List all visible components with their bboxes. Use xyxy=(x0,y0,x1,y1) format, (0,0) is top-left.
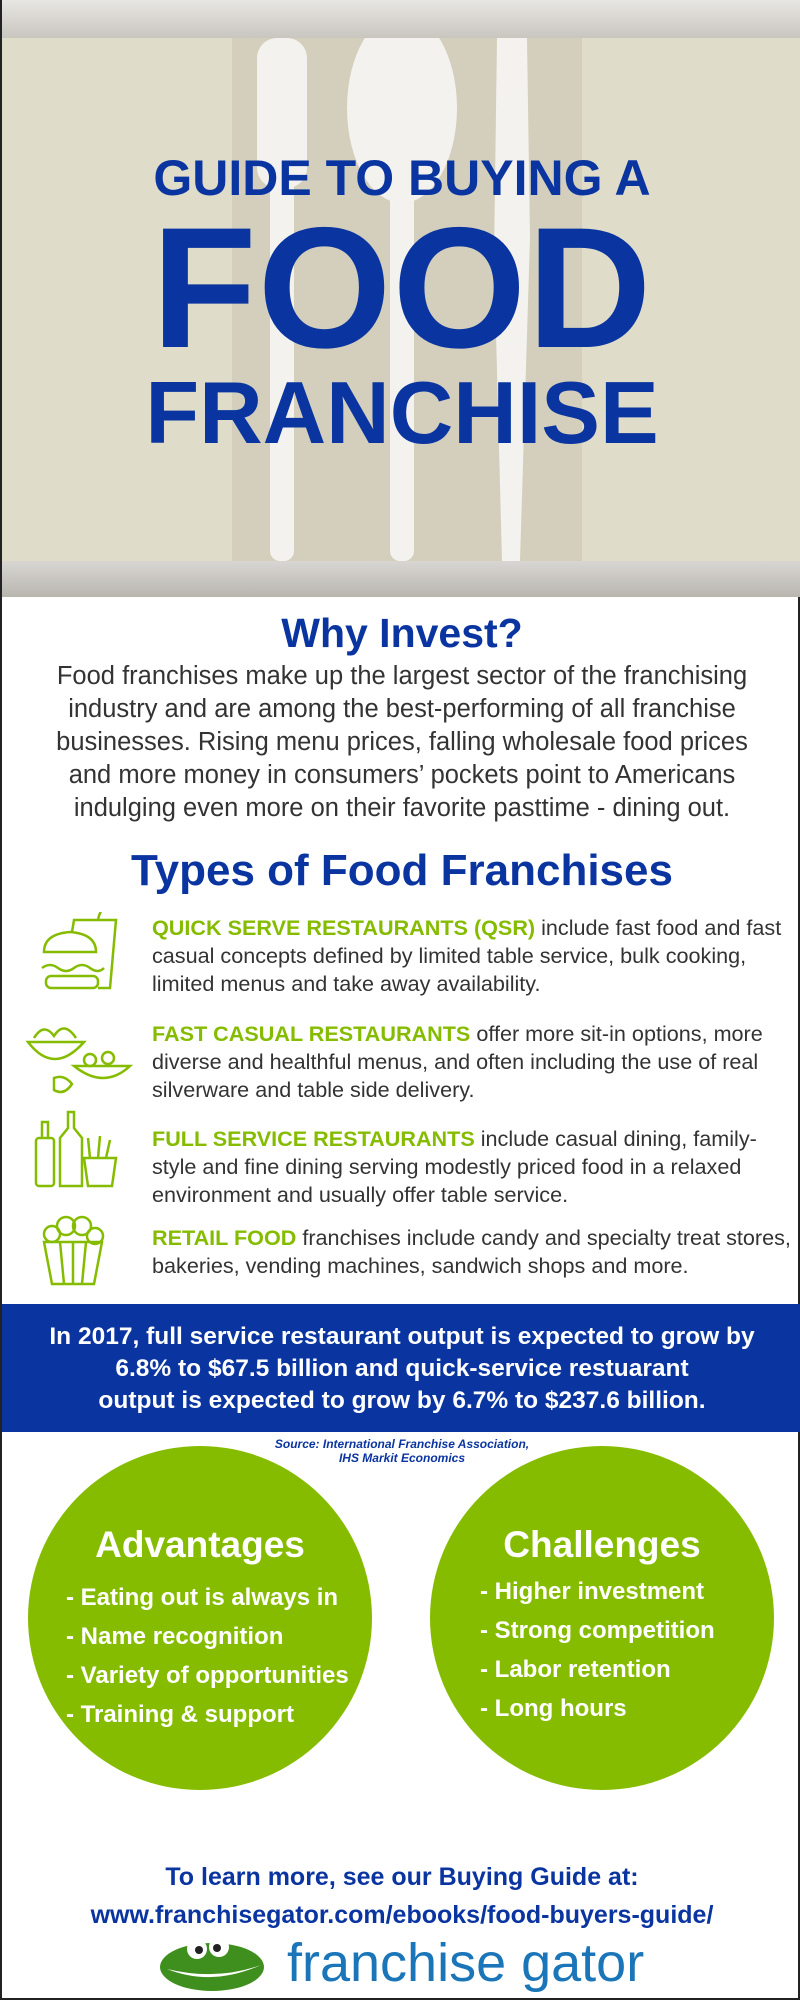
blue band: stats xyxy=(2,1304,800,1432)
item: retail: RETAIL FOOD franchises include candy and specialty treat stores, bakeries, vending machines, sandwich shops and more. xyxy=(152,1225,791,1278)
circle: advantages xyxy=(28,1446,372,1790)
call to action xyxy=(90,1863,714,1929)
circle: advantages: - Training & support xyxy=(66,1701,294,1728)
icon: bottles xyxy=(34,1110,118,1188)
source xyxy=(275,1437,529,1465)
logo: franchise gator xyxy=(287,1933,644,1993)
blue band: stats: In 2017, full service restaurant output is expected to grow by xyxy=(49,1323,755,1350)
blue band: stats: 6.8% to $67.5 billion and quick-service restuarant xyxy=(115,1355,689,1382)
icon: gator xyxy=(160,1943,264,1991)
call to action: www.franchisegator.com/ebooks/food-buyers-guide/ xyxy=(91,1901,713,1929)
source: IHS Markit Economics xyxy=(339,1451,465,1465)
circle: challenges: - Long hours xyxy=(480,1695,627,1722)
wood strip top xyxy=(2,0,800,38)
item: QSR: QUICK SERVE RESTAURANTS (QSR) include fast food and fast casual concepts defined by limited table service, bulk cooking, limited menus and take away availability. xyxy=(152,915,781,996)
icon: popcorn xyxy=(42,1216,104,1286)
circle: advantages: - Eating out is always in xyxy=(66,1584,338,1611)
circle: challenges: - Strong competition xyxy=(480,1617,715,1644)
circle: advantages: Advantages xyxy=(95,1524,305,1565)
heading: types: Types of Food Franchises xyxy=(131,846,673,895)
title: FRANCHISE xyxy=(145,363,659,462)
circle: advantages: - Variety of opportunities xyxy=(66,1662,349,1689)
circle: challenges: - Labor retention xyxy=(480,1656,671,1683)
icon: burger xyxy=(41,912,118,990)
item: full service: FULL SERVICE RESTAURANTS include casual dining, family-style and fine dining serving modestly priced food in a relaxed environment and usually offer table service. xyxy=(152,1126,757,1207)
circle: challenges: Challenges xyxy=(503,1524,701,1565)
circle: challenges xyxy=(430,1446,774,1790)
wood strip bottom xyxy=(2,561,800,597)
title xyxy=(145,150,659,462)
title: FOOD xyxy=(152,192,652,384)
heading: why invest: Why Invest? xyxy=(281,610,523,656)
blue band: stats: output is expected to grow by 6.7% to $237.6 billion. xyxy=(98,1387,706,1414)
icon: salad xyxy=(26,1027,134,1094)
item: fast casual: FAST CASUAL RESTAURANTS offer more sit-in options, more diverse and healthful menus, and often including the use of real silverware and table side delivery. xyxy=(152,1021,763,1102)
title: GUIDE TO BUYING A xyxy=(153,150,651,206)
call to action: To learn more, see our Buying Guide at: xyxy=(165,1863,639,1891)
cutlery illustration xyxy=(232,38,582,561)
header panel xyxy=(2,38,800,561)
text: why invest: Food franchises make up the largest sector of the franchising industry and are among the best-performing of all franchise businesses. Rising menu prices, falling wholesale food prices and more money in consumers’ pockets point to Americans indulging even more on their favorite pasttime - dining out. xyxy=(56,662,748,822)
circle: challenges: - Higher investment xyxy=(480,1578,704,1605)
source: Source: International Franchise Association, xyxy=(275,1437,529,1451)
circle: advantages: - Name recognition xyxy=(66,1623,283,1650)
